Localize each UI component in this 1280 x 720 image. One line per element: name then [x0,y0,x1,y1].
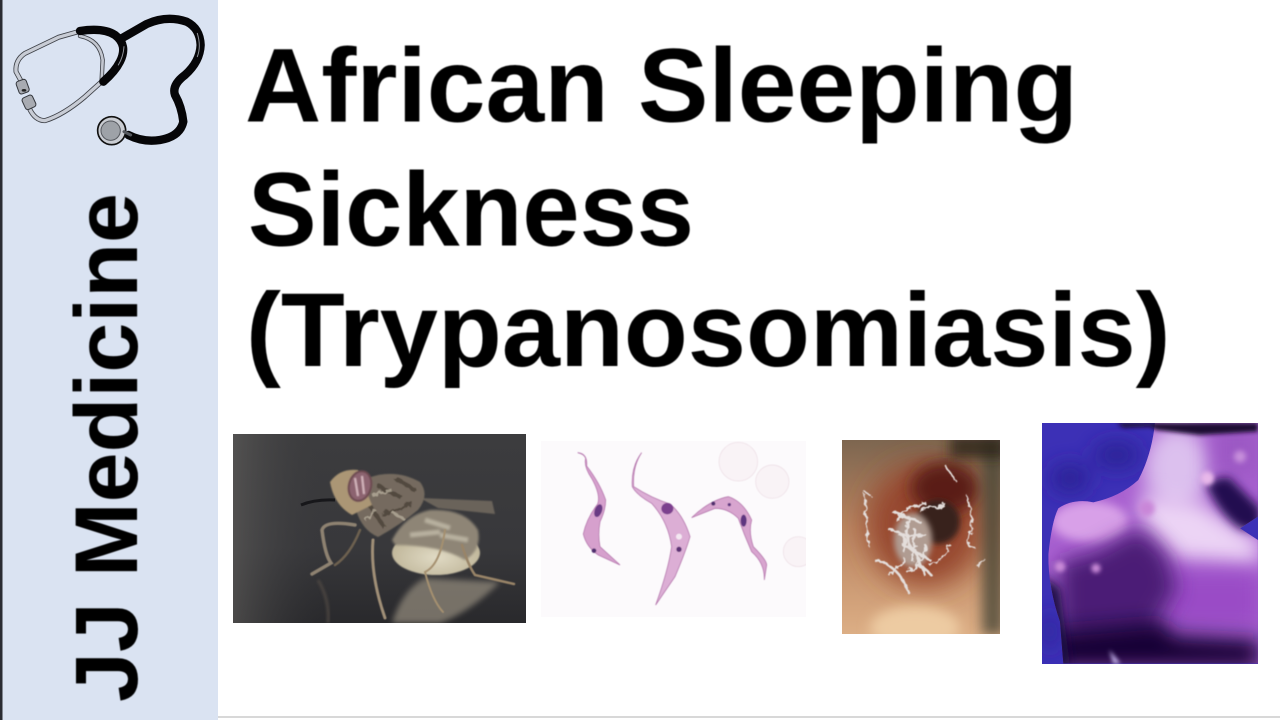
lymph nodes [1201,472,1214,485]
photo: tsetse fly [233,434,526,623]
icon: stethoscope [15,19,201,145]
upper abdomen [392,510,479,560]
abdomen [391,543,481,576]
photo: trypanosomes on blood smear [576,442,806,606]
abdomen markings [410,520,468,540]
chest piece [98,117,131,145]
title [245,28,1170,389]
photo: skin lesion (chancre) [842,440,1000,634]
eye [347,470,373,502]
sheet highlight [1109,650,1121,664]
right parasite [692,497,767,580]
central shadow [1060,528,1177,642]
grey scale haze [894,513,932,567]
head [330,470,372,515]
left edge shadow [1050,572,1071,664]
bright band [1140,495,1260,565]
title: African Sleeping [245,28,1078,144]
wing [420,498,495,514]
headset tubes [16,32,103,121]
neck shadow [1207,477,1260,532]
ear pieces [15,79,37,110]
white scale [865,465,985,592]
hair [1117,423,1258,435]
thorax mottling [370,478,415,528]
bright lower skin [868,600,962,634]
fly reflection [392,578,500,623]
back silhouette [1040,422,1260,668]
dark red patch [911,462,979,514]
black tubing [80,19,201,141]
thorax highlights [365,490,405,520]
dark lesion centre [916,500,960,544]
shoulder light [1052,501,1128,542]
erythema [867,463,983,587]
dark background mottling [1043,442,1140,652]
left parasite [578,453,620,565]
lower right tone [1163,572,1260,628]
bottom shadow [1043,622,1260,668]
right neck tone [1202,434,1255,476]
middle parasite [632,453,690,605]
neck light [1143,425,1210,512]
title: (Trypanosomiasis) [246,272,1170,389]
shaded top right [950,436,1005,458]
title: Sickness [248,152,694,268]
thorax [356,474,425,537]
shaded right edge [982,440,1004,635]
sidebar label: JJ Medicine [56,193,156,702]
legs [312,523,514,618]
red blood cells [719,442,813,567]
photo: enlarged neck lymph nodes (purple tint) [1040,422,1260,668]
leg reflection [318,580,328,623]
proboscis [301,500,335,505]
